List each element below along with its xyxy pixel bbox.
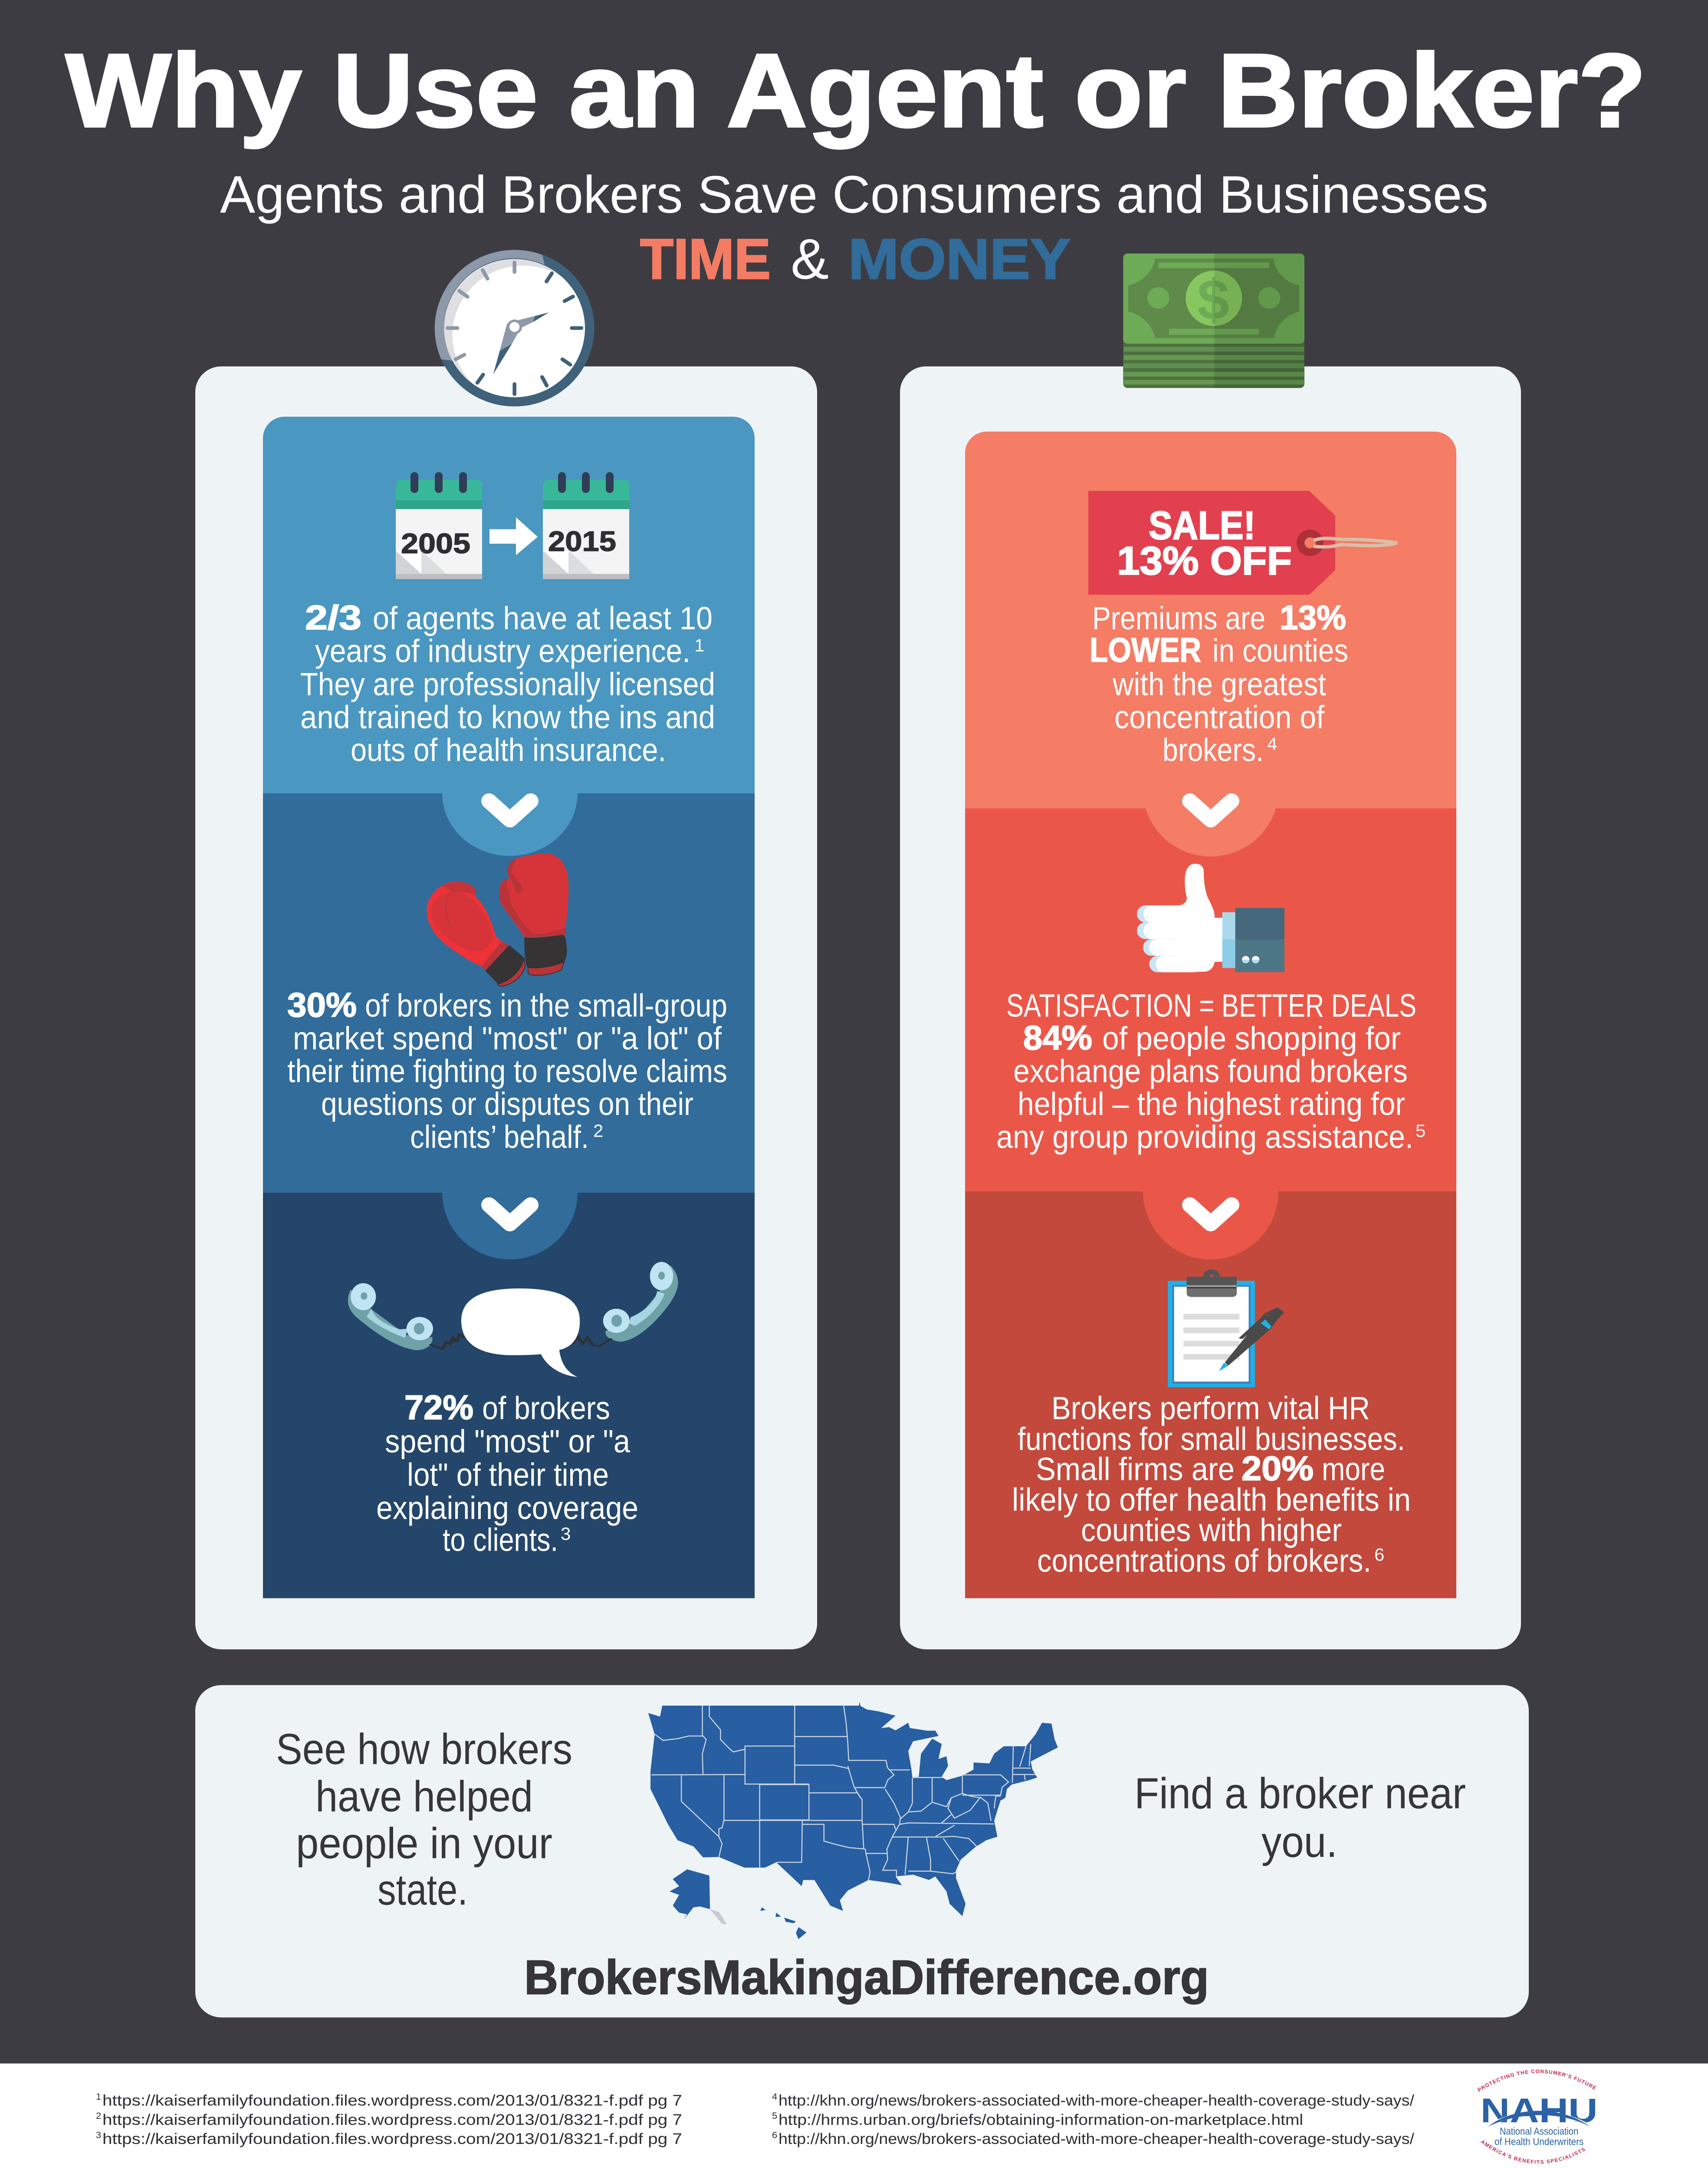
chevron connector — [1146, 801, 1276, 856]
icon: stack of money — [1123, 253, 1304, 388]
chevron connector — [1143, 1191, 1278, 1259]
arrow — [489, 517, 538, 555]
text block: fighting claims: 30% — [287, 986, 357, 1024]
text block: see how brokers: people in your — [296, 1819, 552, 1868]
text block: satisfaction: helpful – the highest rating for — [1018, 1086, 1405, 1122]
logo: NAHU: National Association — [1500, 2126, 1578, 2137]
text block: fighting claims: clients’ behalf. — [410, 1118, 589, 1155]
icon: stack of money: $ — [1197, 268, 1229, 331]
text block: HR functions: 6 — [1374, 1544, 1384, 1565]
text block: HR functions: Small firms are — [1036, 1451, 1235, 1487]
text block: satisfaction: SATISFACTION = BETTER DEALS — [1006, 987, 1416, 1023]
icon: clock — [435, 250, 595, 407]
chevron connector — [442, 793, 578, 856]
text block: fighting claims: market spend "most" or "a lot" of — [293, 1020, 722, 1056]
text block: explaining coverage: of brokers — [482, 1390, 610, 1426]
heading: time and money: & — [791, 227, 829, 291]
text block: HR functions: functions for small businesses. — [1018, 1420, 1405, 1457]
section: satisfaction — [965, 801, 1456, 1191]
icon: clipboard and pen — [1168, 1269, 1284, 1387]
text block: explaining coverage: spend "most" or "a — [385, 1423, 630, 1460]
icon: sale tag: SALE! — [1149, 503, 1255, 548]
logo: NAHU — [1476, 2068, 1599, 2165]
footnotes: right column: 5 — [772, 2110, 777, 2121]
text block: lower premiums: Premiums are — [1092, 600, 1265, 636]
text block: find a broker: Find a broker near — [1134, 1769, 1466, 1818]
section: fighting claims — [263, 793, 755, 1193]
text block: fighting claims: 2 — [593, 1121, 603, 1141]
footnotes: left column: 3 — [96, 2130, 101, 2140]
text block: explaining coverage — [376, 1388, 638, 1558]
text block: lower premiums: 13% — [1280, 598, 1346, 637]
heading: time and money — [640, 227, 1071, 291]
title: Why Use an Agent or Broker? — [66, 33, 1646, 149]
text block: HR functions: Brokers perform vital HR — [1051, 1390, 1370, 1426]
footnotes: left column: 1 — [96, 2091, 101, 2102]
panel: time — [195, 366, 817, 1649]
section: HR functions — [965, 1191, 1456, 1598]
footnotes: left column: https://kaiserfamilyfoundation.files.wordpress.com/2013/01/8321-f.pdf pg 7 — [102, 2092, 682, 2109]
text block: lower premiums: brokers. — [1163, 732, 1264, 768]
text block: explaining coverage: 3 — [561, 1523, 571, 1544]
text block: fighting claims — [287, 986, 727, 1155]
icon: boxing gloves — [427, 853, 568, 986]
subtitle: Agents and Brokers Save Consumers and Businesses — [220, 165, 1488, 224]
text block: lower premiums: 4 — [1267, 733, 1277, 754]
text block: HR functions: concentrations of brokers. — [1037, 1542, 1371, 1578]
text block: explaining coverage: 72% — [404, 1388, 473, 1427]
icon: thumbs up — [1137, 864, 1284, 972]
text block: HR functions — [1012, 1390, 1411, 1578]
logo: NAHU: of Health Underwriters — [1494, 2136, 1583, 2147]
text block: see how brokers — [276, 1725, 572, 1914]
text block: HR functions: counties with higher — [1081, 1512, 1342, 1548]
heading: time and money: MONEY — [848, 227, 1071, 291]
text block: agent experience: and trained to know the ins and — [300, 699, 715, 735]
icon: sale tag — [1088, 491, 1397, 595]
footnotes: left column — [96, 2091, 682, 2147]
text block: agent experience: of agents have at least 10 — [373, 600, 713, 636]
text block: fighting claims: of brokers in the small-group — [365, 987, 727, 1023]
text block: agent experience: 1 — [694, 635, 704, 655]
logo: NAHU: NAHU — [1481, 2091, 1598, 2130]
map: United States — [648, 1702, 1058, 1939]
text block: explaining coverage: to clients. — [443, 1522, 558, 1558]
calendar 2015: 2015 — [548, 526, 616, 557]
footer — [0, 2064, 1708, 2170]
website url: BrokersMakingaDifference.org — [524, 1950, 1209, 2004]
text block: satisfaction: exchange plans found brokers — [1013, 1053, 1408, 1089]
text block: agent experience: They are professionally licensed — [300, 666, 715, 702]
text block: HR functions: likely to offer health benefits in — [1012, 1482, 1411, 1518]
section: lower premiums — [965, 432, 1456, 808]
heading: time and money: TIME — [640, 227, 771, 291]
text block: agent experience: outs of health insurance. — [351, 732, 666, 768]
text block: find a broker: you. — [1261, 1818, 1337, 1866]
text block: see how brokers: See how brokers — [276, 1725, 572, 1773]
text block: satisfaction: 5 — [1416, 1121, 1426, 1141]
icon: sale tag: 13% OFF — [1117, 538, 1292, 583]
footnotes: right column: 6 — [772, 2130, 777, 2140]
text block: fighting claims: questions or disputes on their — [321, 1086, 693, 1122]
footnotes: left column: https://kaiserfamilyfoundation.files.wordpress.com/2013/01/8321-f.pdf pg 7 — [102, 2111, 682, 2128]
text block: HR functions: 20% — [1242, 1449, 1314, 1487]
text block: explaining coverage: explaining coverage — [376, 1490, 638, 1526]
text block: lower premiums: LOWER — [1090, 631, 1201, 669]
text block: agent experience: years of industry experience. — [315, 633, 690, 669]
text block: find a broker — [1134, 1769, 1466, 1866]
text block: lower premiums: with the greatest — [1112, 666, 1326, 702]
footnotes: left column: 2 — [96, 2110, 101, 2121]
text block: agent experience — [300, 598, 715, 768]
footnotes: right column — [772, 2091, 1414, 2147]
text block: lower premiums — [1090, 598, 1348, 768]
calendar 2015 — [543, 472, 629, 579]
footnotes: left column: https://kaiserfamilyfoundation.files.wordpress.com/2013/01/8321-f.pdf pg 7 — [102, 2130, 682, 2147]
icon: phones and speech bubble — [348, 1262, 678, 1377]
text block: see how brokers: state. — [378, 1866, 468, 1914]
section: explaining coverage — [263, 1193, 755, 1598]
text block: satisfaction — [996, 987, 1426, 1155]
logo: NAHU: PROTECTING THE CONSUMER’S FUTURE — [1476, 2068, 1598, 2093]
text block: HR functions: more — [1322, 1451, 1385, 1487]
section: agent experience — [263, 417, 755, 793]
icon: calendars 2005 to 2015 — [396, 472, 629, 579]
logo: NAHU: AMERICA’S BENEFITS SPECIALISTS — [1480, 2139, 1587, 2165]
calendar 2005: 2005 — [401, 528, 470, 559]
text block: agent experience: 2/3 — [305, 598, 361, 637]
text block: satisfaction: any group providing assistance. — [996, 1118, 1413, 1155]
text block: lower premiums: in counties — [1212, 632, 1348, 668]
footnotes: right column: http://hrms.urban.org/briefs/obtaining-information-on-marketplace.html — [778, 2111, 1303, 2128]
text block: see how brokers: have helped — [315, 1772, 533, 1821]
panel: money — [900, 366, 1521, 1649]
footnotes: right column: http://khn.org/news/brokers-associated-with-more-cheaper-health-coverage-study-says/ — [778, 2092, 1414, 2109]
panel: broker finder — [195, 1685, 1529, 2018]
text block: satisfaction: of people shopping for — [1102, 1020, 1401, 1056]
chevron connector — [442, 1193, 578, 1259]
text block: satisfaction: 84% — [1023, 1019, 1092, 1057]
calendar 2005 — [396, 472, 482, 579]
footnotes: right column: http://khn.org/news/brokers-associated-with-more-cheaper-health-coverage-study-says/ — [778, 2130, 1414, 2147]
text block: lower premiums: concentration of — [1114, 699, 1325, 735]
text block: explaining coverage: lot" of their time — [407, 1457, 609, 1493]
footnotes: right column: 4 — [772, 2091, 777, 2102]
text block: fighting claims: their time fighting to resolve claims — [287, 1053, 727, 1089]
